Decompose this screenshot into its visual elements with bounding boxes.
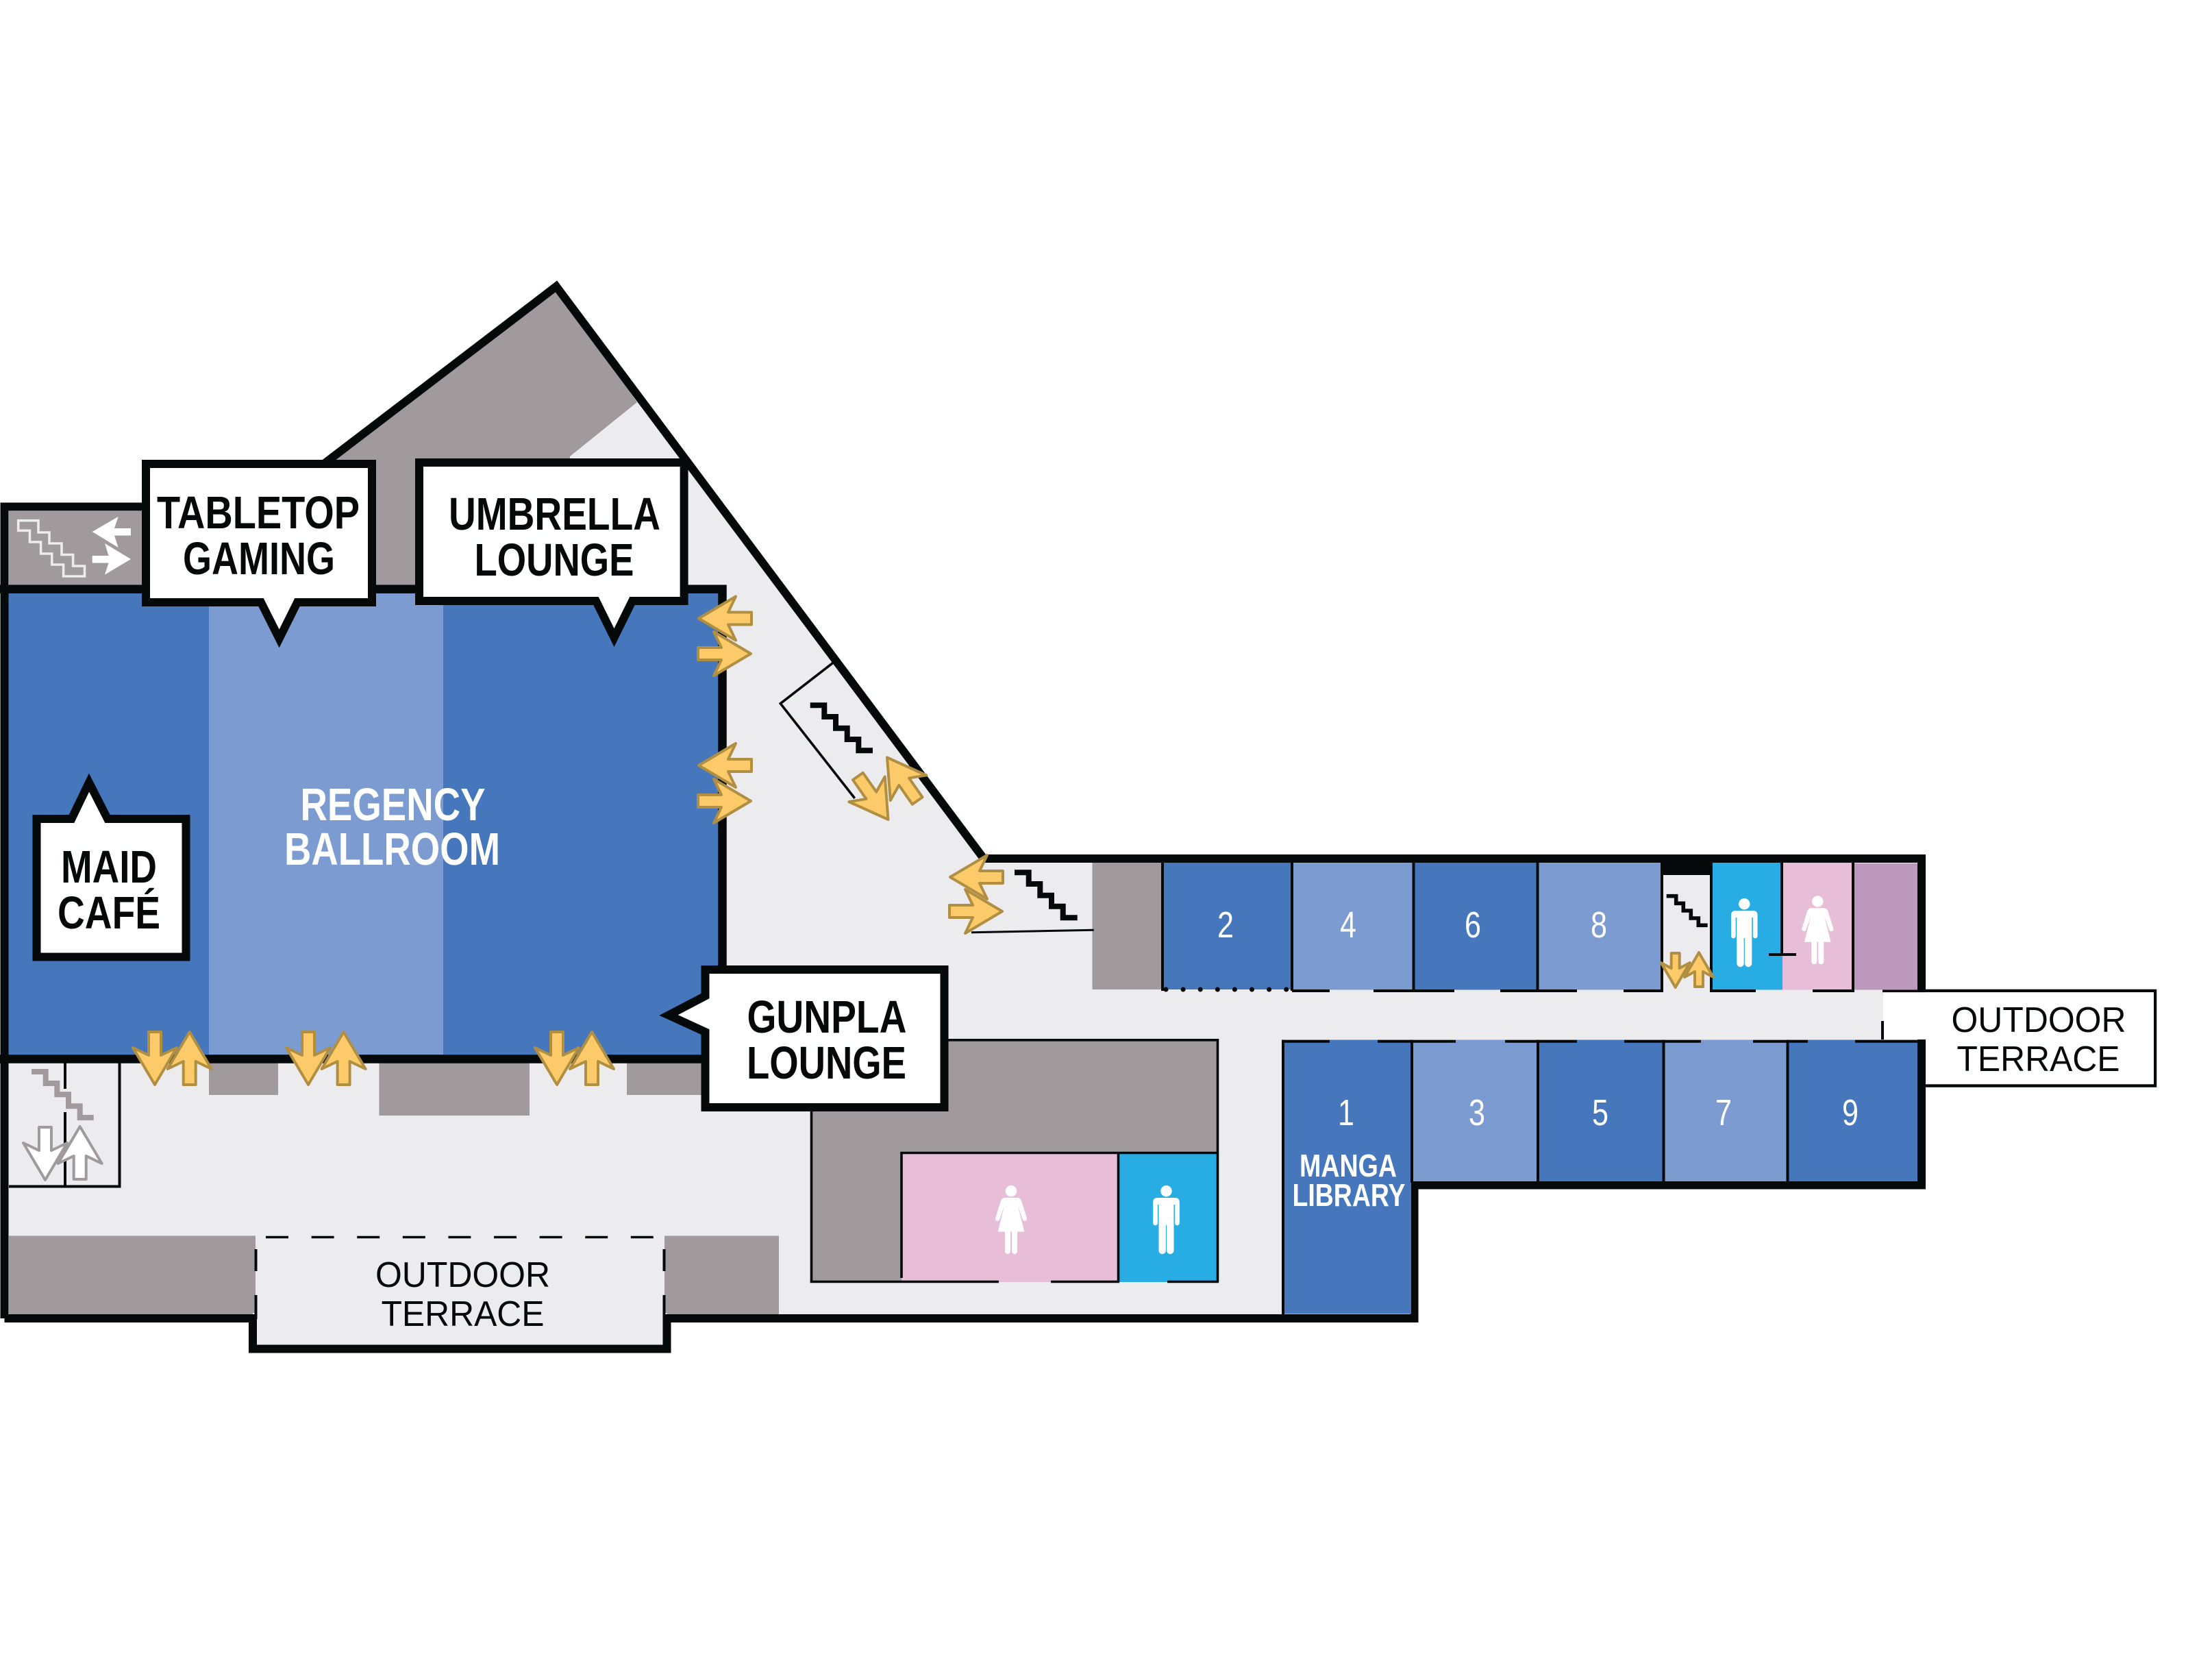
callout: Gunpla Lounge: LOUNGE (747, 1037, 906, 1089)
room 4: 4 (1340, 904, 1356, 946)
terrace label: OUTDOOR (375, 1255, 550, 1295)
storage room east (1853, 863, 1917, 989)
callout: Umbrella Lounge: LOUNGE (474, 534, 634, 586)
room 4 (1292, 863, 1413, 989)
room 9 (1787, 1040, 1918, 1181)
arrows: ballroom east doors 1 (698, 596, 751, 676)
arrows: east stair (1661, 952, 1713, 987)
room 9: 9 (1842, 1092, 1859, 1133)
terrace label (1951, 1000, 2126, 1079)
outer walls (4, 286, 1922, 1349)
arrows: diagonal stair (840, 745, 935, 832)
callout: Tabletop Gaming: GAMING (183, 533, 335, 584)
callout: Gunpla Lounge (669, 970, 944, 1107)
room: Regency Ballroom (0, 589, 722, 1059)
stair room, upper corridor (1661, 863, 1713, 925)
men's restroom main (1118, 1153, 1217, 1282)
room 5: 5 (1592, 1092, 1608, 1133)
room 8: 8 (1591, 904, 1607, 946)
ballroom label: REGENCY (300, 779, 485, 830)
arrows: corridor stair (949, 855, 1003, 933)
ballroom label: BALLROOM (284, 824, 500, 875)
arrows: ballroom south doors 2 (286, 1032, 366, 1085)
service areas (9, 286, 1217, 1314)
room 3: 3 (1469, 1092, 1485, 1133)
callout: Umbrella Lounge (419, 463, 684, 638)
ballroom label (284, 779, 500, 875)
terrace label (375, 1255, 550, 1334)
room 5 (1539, 1040, 1663, 1181)
library label: MANGA (1300, 1148, 1397, 1183)
arrows: ballroom east doors 2 (698, 743, 751, 823)
room 8 (1538, 863, 1661, 989)
stair room west (9, 1059, 119, 1187)
room 2: 2 (1217, 904, 1234, 946)
arrows: ballroom south doors 1 (133, 1032, 212, 1085)
library label (1292, 1148, 1406, 1213)
room 3 (1411, 1040, 1539, 1181)
callout: Tabletop Gaming (146, 464, 372, 639)
manga library (1283, 1040, 1411, 1315)
stair room corridor (971, 872, 1094, 933)
women's restroom main (902, 1153, 1118, 1282)
callout: Tabletop Gaming: TABLETOP (157, 487, 360, 539)
room 7: 7 (1715, 1092, 1732, 1133)
terrace label: OUTDOOR (1951, 1000, 2126, 1040)
men's restroom east (1713, 863, 1782, 989)
stair room diagonal (780, 663, 873, 798)
room 6 (1413, 863, 1538, 989)
icon: white stairs northwest (18, 521, 85, 576)
icon: stairs diagonal (810, 705, 873, 750)
building floor (4, 286, 1922, 1349)
callout: Gunpla Lounge: GUNPLA (747, 992, 907, 1043)
bottom terrace (253, 1233, 667, 1349)
icon: white arrows northwest (92, 517, 131, 575)
callout: Maid Cafe: CAFÉ (58, 887, 160, 939)
lower room walls (1282, 1040, 1926, 1183)
terrace label: TERRACE (1956, 1039, 2120, 1079)
icon: stairs west (32, 1072, 94, 1118)
icon: stairs corridor (1015, 872, 1078, 918)
terrace label: TERRACE (381, 1294, 544, 1334)
upper room walls (1163, 860, 1854, 992)
room 6: 6 (1465, 904, 1481, 946)
room 2 (1164, 863, 1291, 989)
callout: Maid Cafe: MAID (61, 841, 157, 893)
library label: LIBRARY (1292, 1177, 1406, 1213)
restroom block walls (810, 1040, 1219, 1282)
manga library: 1 (1338, 1092, 1354, 1133)
arrows: ballroom south doors 3 (535, 1032, 614, 1085)
callout: Maid Cafe (37, 783, 186, 957)
callout: Umbrella Lounge: UMBRELLA (449, 489, 660, 540)
icon: white arrows west (23, 1127, 102, 1180)
women's restroom east (1782, 863, 1852, 989)
right terrace (1882, 991, 2155, 1085)
room 7 (1663, 1040, 1787, 1181)
